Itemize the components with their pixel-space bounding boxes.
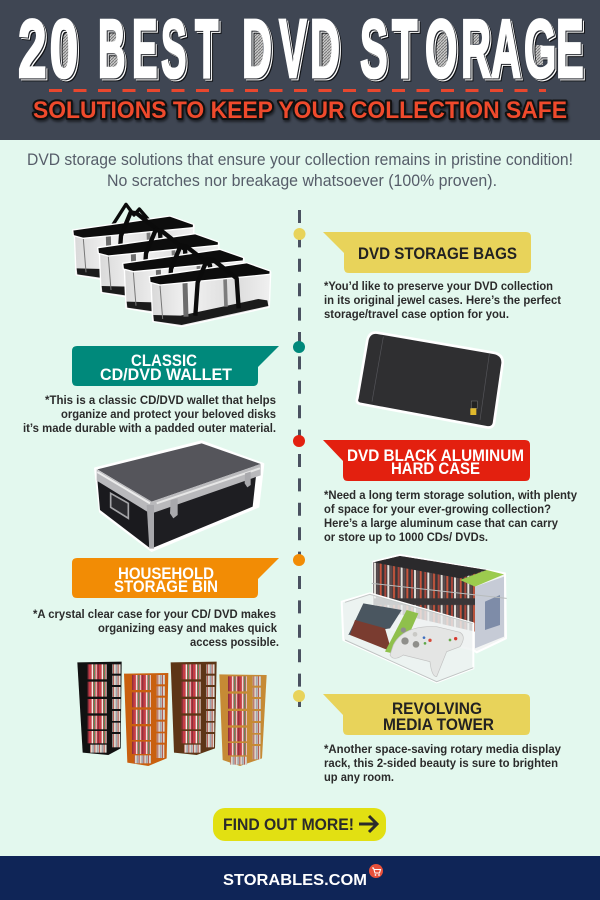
banner: household bin: STORAGE BIN [114,578,218,596]
image: storage bags [73,204,270,326]
case latches [170,472,251,518]
text: classic wallet: *This is a classic CD/DVD wallet that helps [45,395,276,407]
timeline dot: bags [294,228,306,240]
footer band [0,856,600,900]
banner: DVD storage bags [323,232,531,273]
text: revolving tower: up any room. [324,772,394,784]
banner: revolving tower: MEDIA TOWER [383,716,494,734]
dashed divider [49,89,546,92]
image: media towers [77,662,267,766]
text: household bin: access possible. [190,637,279,649]
text: revolving tower [324,744,562,784]
text: hard case [324,490,578,544]
header band [0,0,600,140]
tower: walnut [171,662,217,755]
title hatch shading [57,26,543,70]
text: household bin: organizing easy and makes quick [98,623,278,635]
case handle [111,493,128,518]
banner: hard case: HARD CASE [391,460,480,478]
timeline [293,210,306,707]
banner: hard case: DVD BLACK ALUMINUM [347,447,524,465]
banner: revolving tower [323,694,530,735]
footer brand: STORABLES.COM [223,872,367,889]
banner: classic wallet [72,346,279,386]
title: 20 [18,1,78,95]
text: classic wallet: it’s made durable with a padded outer material. [23,423,276,435]
timeline dot: wallet [293,341,305,353]
tower: tan [219,674,267,766]
title: STORAGE [360,2,584,95]
text: household bin [33,609,279,649]
text: revolving tower: rack, this 2-sided beauty is sure to brighten [324,758,558,770]
title [18,1,584,95]
text: revolving tower: *Another space-saving rotary media display [324,744,562,756]
game controller [390,627,463,677]
subtitle: SOLUTIONS TO KEEP YOUR COLLECTION SAFE [33,97,567,124]
timeline dot: tower [293,690,305,702]
text: household bin: *A crystal clear case for your CD/ DVD makes [33,609,276,621]
text: DVD storage bags: storage/travel case option for you. [324,309,509,321]
icon: cart badge [369,864,383,878]
timeline dot: bin [293,554,305,566]
title: DVD [242,2,340,95]
tower: orange [124,673,168,766]
image: aluminum case [95,441,263,551]
icon: arrow [359,816,377,832]
tower: black [77,662,122,755]
banner: hard case [323,440,530,481]
banner: household bin: HOUSEHOLD [118,565,214,583]
text: hard case: Here’s a large aluminum case that can carry [324,518,559,530]
banner: classic wallet: CLASSIC [131,352,197,370]
wallet tag [470,408,476,415]
title: BEST [98,2,218,95]
button: find out more: FIND OUT MORE! [223,816,354,834]
image: CD wallet [357,333,503,427]
image: storage bin [342,555,507,682]
text: DVD storage bags: *You’d like to preserve your DVD collection [324,281,553,293]
intro text: No scratches nor breakage whatsoever (100% proven). [107,171,497,190]
banner: classic wallet: CD/DVD WALLET [100,366,232,384]
banner: DVD storage bags: DVD STORAGE BAGS [358,245,517,263]
button: find out more [213,808,386,841]
timeline dot: hard case [293,435,305,447]
text: DVD storage bags: in its original jewel cases. Here’s the perfect [324,295,561,307]
text: hard case: *Need a long term storage solution, with plenty [324,490,578,502]
text: classic wallet [23,395,276,435]
text: DVD storage bags [324,281,561,321]
text: hard case: or store up to 1000 CDs/ DVDs. [324,532,488,544]
text: hard case: of space for your ever-growing collection? [324,504,551,516]
banner: revolving tower: REVOLVING [392,700,482,718]
banner: household bin [72,558,279,598]
text: classic wallet: organize and protect your beloved disks [61,409,276,421]
intro text [27,150,573,190]
